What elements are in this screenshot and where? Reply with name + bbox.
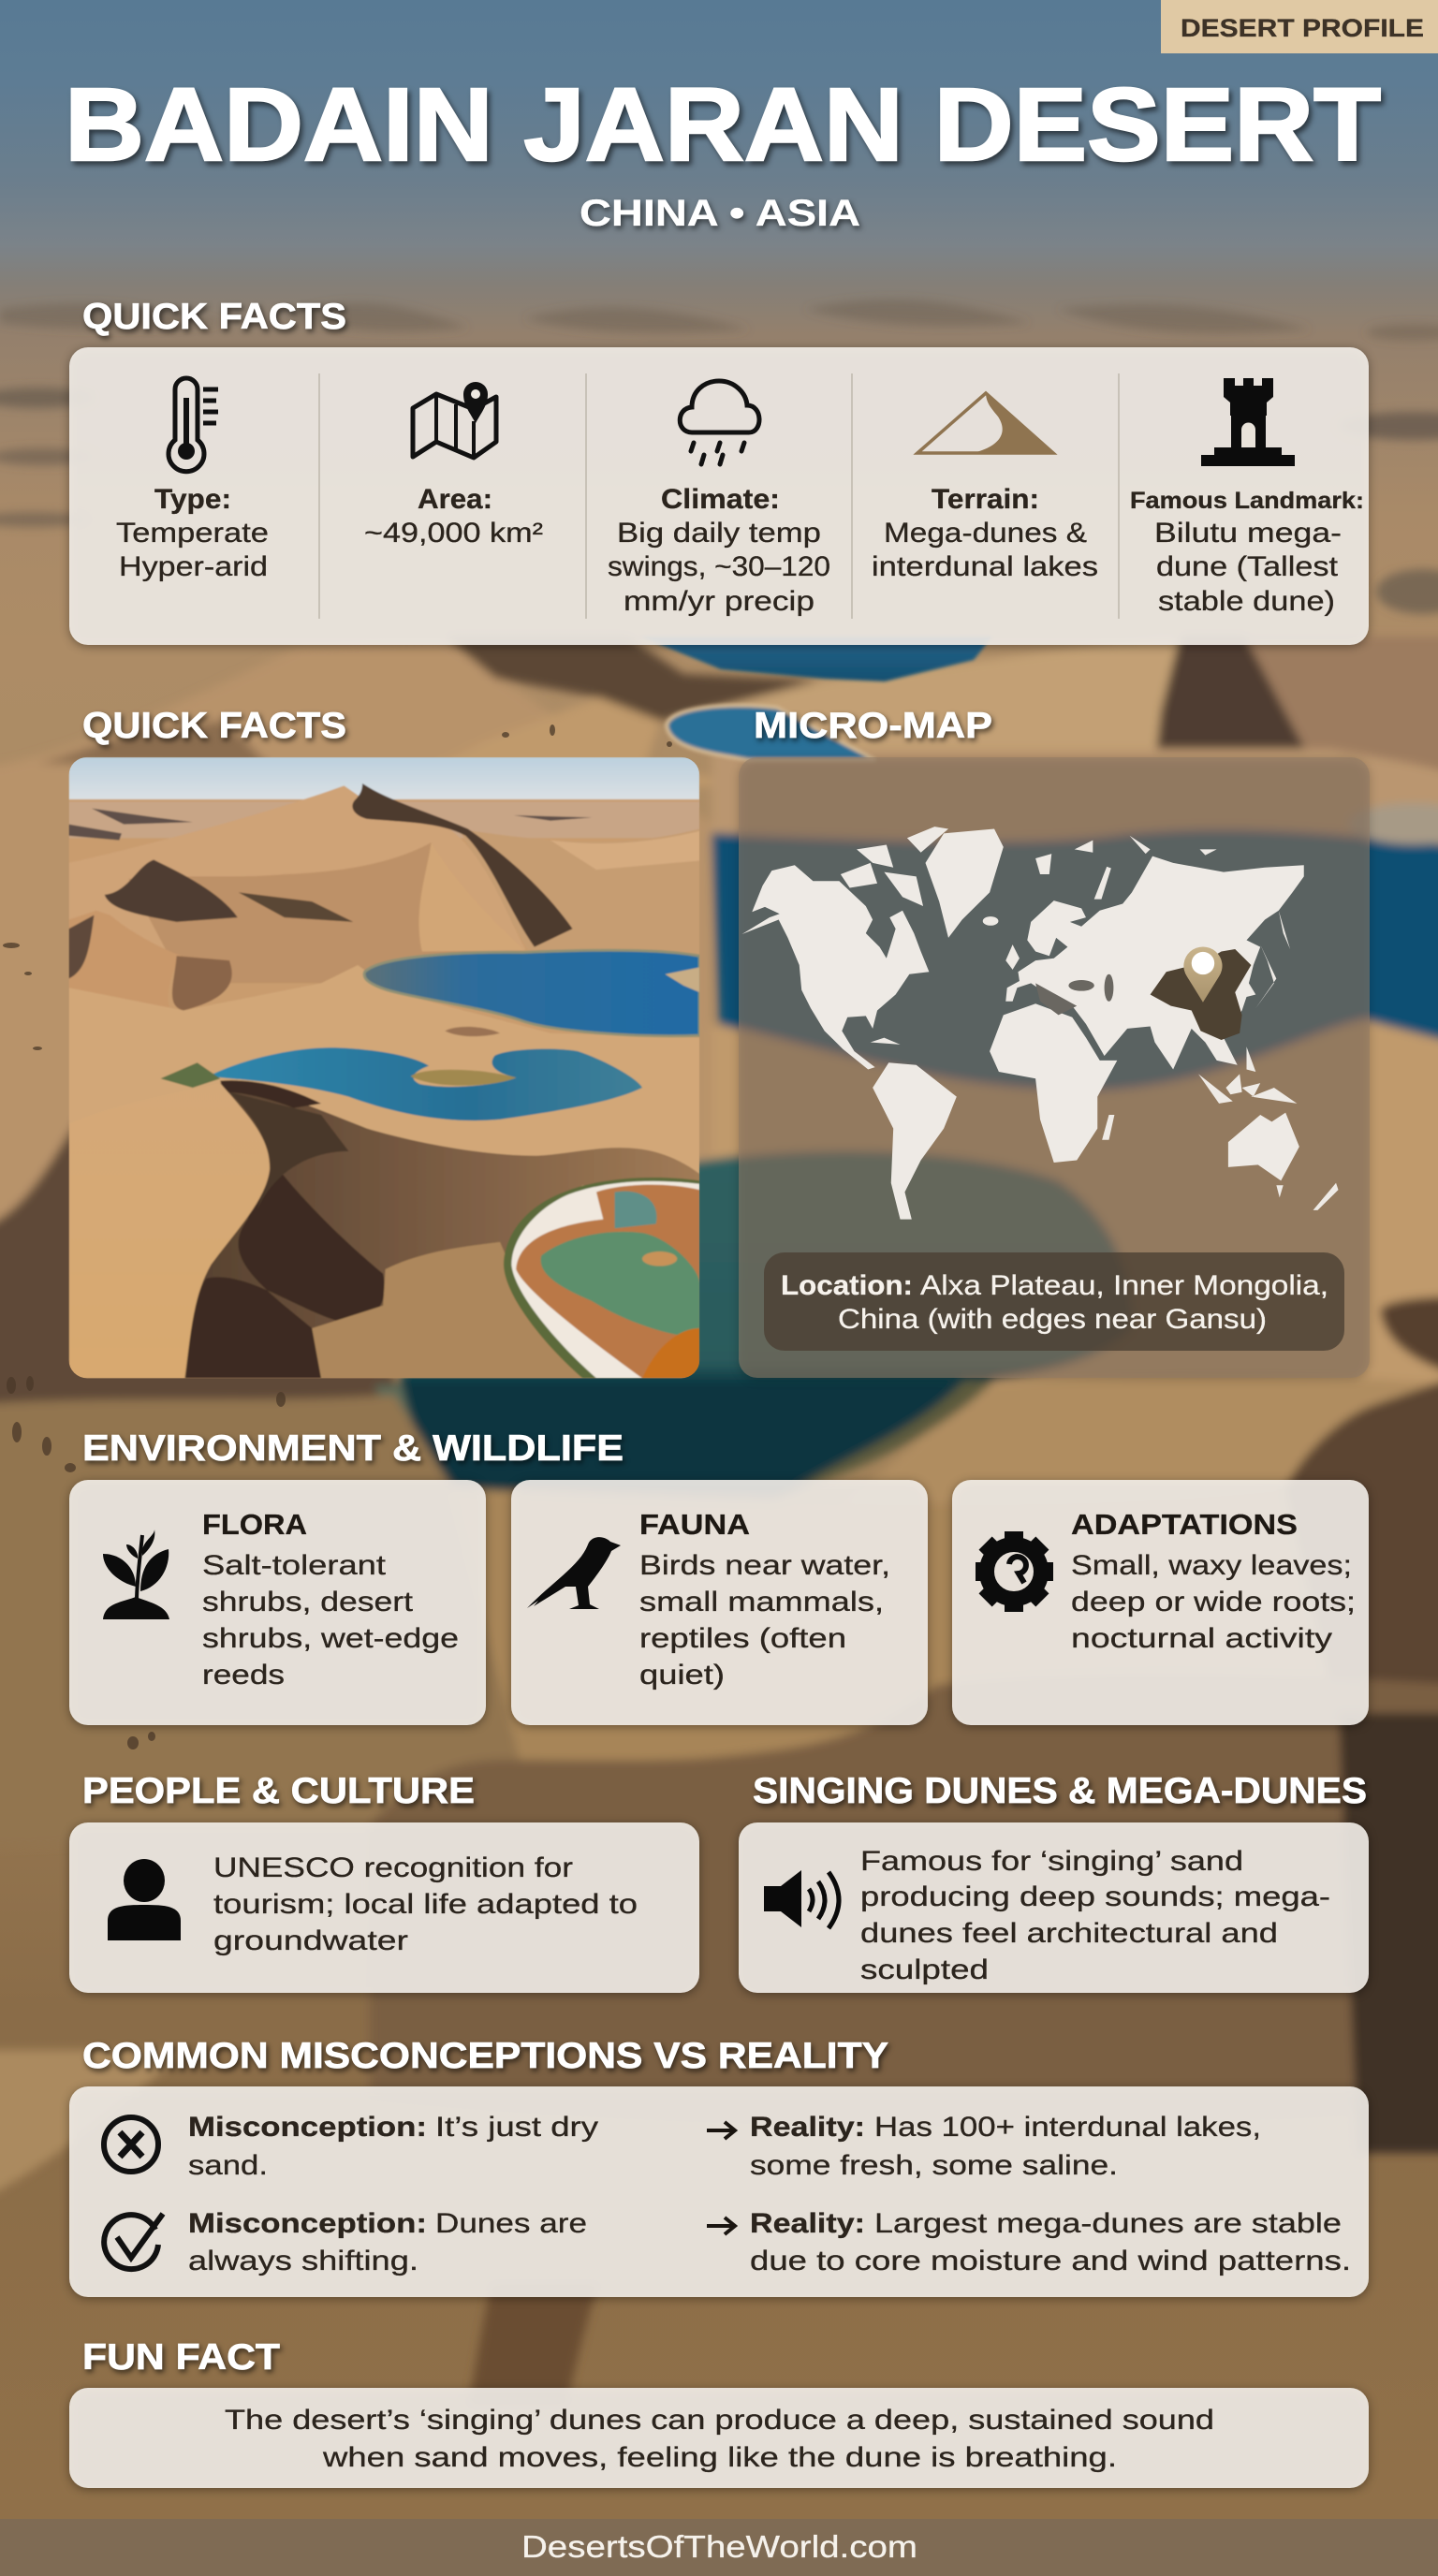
fauna text: Birds near water, <box>639 1550 890 1581</box>
fauna text: quiet) <box>639 1660 725 1690</box>
people text <box>213 1852 638 1956</box>
arrow one <box>707 2122 735 2139</box>
fact: climate: mm/yr precip <box>624 586 814 617</box>
panel: misconceptions vs reality <box>69 2086 1369 2297</box>
adaptations text: Small, waxy leaves; <box>1071 1550 1352 1581</box>
fact: type: Hyper-arid <box>119 551 268 582</box>
foreground slope <box>183 1083 699 1378</box>
heading: singing dunes and mega-dunes: SINGING DUNES & MEGA-DUNES <box>753 1771 1367 1811</box>
misconception one <box>188 2112 598 2181</box>
footer <box>0 2519 1438 2576</box>
mid sand <box>69 965 699 1193</box>
fact: terrain <box>872 484 1098 582</box>
card: singing dunes <box>739 1822 1369 1993</box>
icon: speaker <box>764 1870 839 1928</box>
heading: fun fact: FUN FACT <box>82 2337 280 2378</box>
reality two <box>750 2208 1351 2276</box>
fact: terrain: Mega-dunes & <box>884 518 1087 549</box>
adaptations text: nocturnal activity <box>1071 1623 1332 1654</box>
fact: climate: Climate: <box>661 484 780 515</box>
second lake <box>209 1047 642 1120</box>
location caption: Alxa Plateau, Inner Mongolia, <box>920 1270 1328 1301</box>
fact: terrain: Terrain: <box>932 484 1039 515</box>
fauna text: reptiles (often <box>639 1623 846 1654</box>
continents <box>741 827 1339 1220</box>
icon: check circle <box>104 2214 163 2269</box>
fact: climate: Big daily temp <box>617 518 821 549</box>
darkest dune shadow <box>185 1175 385 1378</box>
icon: gear <box>976 1531 1053 1612</box>
china highlighted <box>1151 949 1251 1040</box>
singing dunes text: sculpted <box>860 1954 989 1985</box>
right dark dune face <box>1153 637 1320 777</box>
flora text: shrubs, wet-edge <box>202 1623 459 1654</box>
lower sand <box>0 1395 524 1849</box>
icon: person <box>108 1859 181 1940</box>
singing dunes text: dunes feel architectural and <box>860 1918 1278 1949</box>
right far dune <box>462 829 699 839</box>
icon: bird <box>527 1537 621 1609</box>
fact: type: Type: <box>154 484 231 515</box>
main dune <box>70 784 522 947</box>
lower dark dune ridge <box>370 1674 1438 2123</box>
world map <box>741 827 1339 1220</box>
card: adaptations: ADAPTATIONS <box>1071 1508 1298 1541</box>
sand below right <box>312 1242 587 1378</box>
fact: famous landmark: stable dune) <box>1158 586 1335 617</box>
misconception one: sand. <box>188 2150 268 2181</box>
icon: tower landmark <box>1201 378 1295 466</box>
card: flora: FLORA <box>202 1508 307 1541</box>
reality two: Reality: <box>750 2208 865 2239</box>
fact: climate: swings, ~30–120 <box>608 551 830 582</box>
people text: tourism; local life adapted to <box>213 1889 638 1920</box>
icon: rain cloud <box>680 381 759 464</box>
singing dunes text: Famous for ‘singing’ sand <box>860 1846 1243 1877</box>
icon: plant <box>103 1530 169 1619</box>
flora text <box>202 1550 459 1690</box>
panel: quick facts <box>69 347 1369 645</box>
foreground lit dune <box>69 1083 270 1378</box>
fact: famous landmark: Bilutu mega- <box>1154 518 1342 549</box>
saline lake <box>504 1178 699 1378</box>
people text: groundwater <box>213 1925 408 1956</box>
sand specks <box>3 724 672 1749</box>
card: flora <box>69 1480 486 1725</box>
inland seas <box>1035 974 1113 1015</box>
location caption: Location: <box>781 1270 913 1301</box>
misconception two <box>188 2208 587 2276</box>
misconception one: Misconception: <box>188 2112 427 2143</box>
heading: micro-map: MICRO-MAP <box>754 706 992 746</box>
badge: desert profile: DESERT PROFILE <box>1181 14 1424 42</box>
fauna text <box>639 1550 890 1690</box>
lake behind map and lower teal lake <box>394 1150 1134 1507</box>
upper lakes <box>640 637 992 760</box>
right sand <box>789 1374 1438 1573</box>
dark left dune <box>0 1105 403 1460</box>
footer: DesertsOfTheWorld.com <box>521 2529 917 2564</box>
sand below large lake <box>712 1020 1438 1395</box>
large lake right <box>712 828 1438 1092</box>
fact: type: Temperate <box>116 518 269 549</box>
reality one: some fresh, some saline. <box>750 2150 1118 2181</box>
location caption <box>764 1252 1344 1351</box>
panel: micro-map <box>739 757 1370 1378</box>
location caption: China (with edges near Gansu) <box>838 1304 1267 1335</box>
upper lake <box>364 950 699 1036</box>
adaptations text: deep or wide roots; <box>1071 1587 1356 1617</box>
flora text: reeds <box>202 1660 285 1690</box>
fact: area: Area: <box>418 484 492 515</box>
singing dunes text: producing deep sounds; mega- <box>860 1881 1330 1912</box>
title: BADAIN JARAN DESERT <box>65 67 1381 183</box>
icon: thermometer <box>169 378 218 472</box>
singing dunes text <box>860 1846 1330 1985</box>
icon: dune <box>917 392 1055 454</box>
heading: environment and wildlife: ENVIRONMENT & WILDLIFE <box>82 1428 624 1469</box>
people text: UNESCO recognition for <box>213 1852 573 1883</box>
upper dark dune shadow <box>445 637 819 721</box>
upper sand band behind map <box>712 749 1438 847</box>
reality two: due to core moisture and wind patterns. <box>750 2246 1351 2276</box>
subtitle: CHINA • ASIA <box>580 193 860 234</box>
adaptations text <box>1071 1550 1356 1654</box>
misconception two: Misconception: <box>188 2208 427 2239</box>
panel: fun fact: when sand moves, feeling like the dune is breathing. <box>322 2442 1117 2473</box>
panel: fun fact: The desert’s ‘singing’ dunes can produce a deep, sustained sound <box>225 2405 1214 2436</box>
heading: quick facts: QUICK FACTS <box>82 297 346 337</box>
far dune ridges <box>0 300 1438 614</box>
reality two: Largest mega-dunes are stable <box>874 2208 1342 2239</box>
badge: desert profile <box>1161 0 1438 53</box>
card: fauna: FAUNA <box>639 1508 750 1541</box>
fact: area: ~49,000 km² <box>364 518 543 549</box>
fact: famous landmark: dune (Tallest <box>1156 551 1339 582</box>
reality one <box>750 2112 1261 2181</box>
photo: dunes and lakes <box>69 757 699 1385</box>
icon: map with pin <box>413 382 496 458</box>
fauna text: small mammals, <box>639 1587 884 1617</box>
flora text: Salt-tolerant <box>202 1550 387 1581</box>
dark shadow face <box>352 783 573 947</box>
fact: area <box>364 484 543 549</box>
card: people and culture <box>69 1822 699 1993</box>
location pin <box>1183 946 1223 1003</box>
misconception one: It’s just dry <box>435 2112 598 2143</box>
flora text: shrubs, desert <box>202 1587 414 1617</box>
heading: quick facts photo: QUICK FACTS <box>82 706 346 746</box>
heading: misconceptions vs reality: COMMON MISCONCEPTIONS VS REALITY <box>82 2036 888 2076</box>
left dune light <box>0 637 712 1245</box>
fact: type <box>116 484 269 582</box>
reality one: Reality: <box>750 2112 865 2143</box>
panel: fun fact <box>69 2388 1369 2488</box>
fact: climate <box>608 484 830 617</box>
fact: famous landmark: Famous Landmark: <box>1130 488 1364 514</box>
misconception two: Dunes are <box>435 2208 587 2239</box>
misconception two: always shifting. <box>188 2246 418 2276</box>
fact: terrain: interdunal lakes <box>872 551 1098 582</box>
heading: people and culture: PEOPLE & CULTURE <box>82 1771 475 1811</box>
icon: x circle <box>104 2117 158 2172</box>
card: adaptations <box>952 1480 1369 1725</box>
card: fauna <box>511 1480 928 1725</box>
reality one: Has 100+ interdunal lakes, <box>874 2112 1261 2143</box>
arrow two <box>707 2217 735 2234</box>
left dark dune <box>105 859 238 922</box>
fact: famous landmark <box>1130 488 1364 617</box>
